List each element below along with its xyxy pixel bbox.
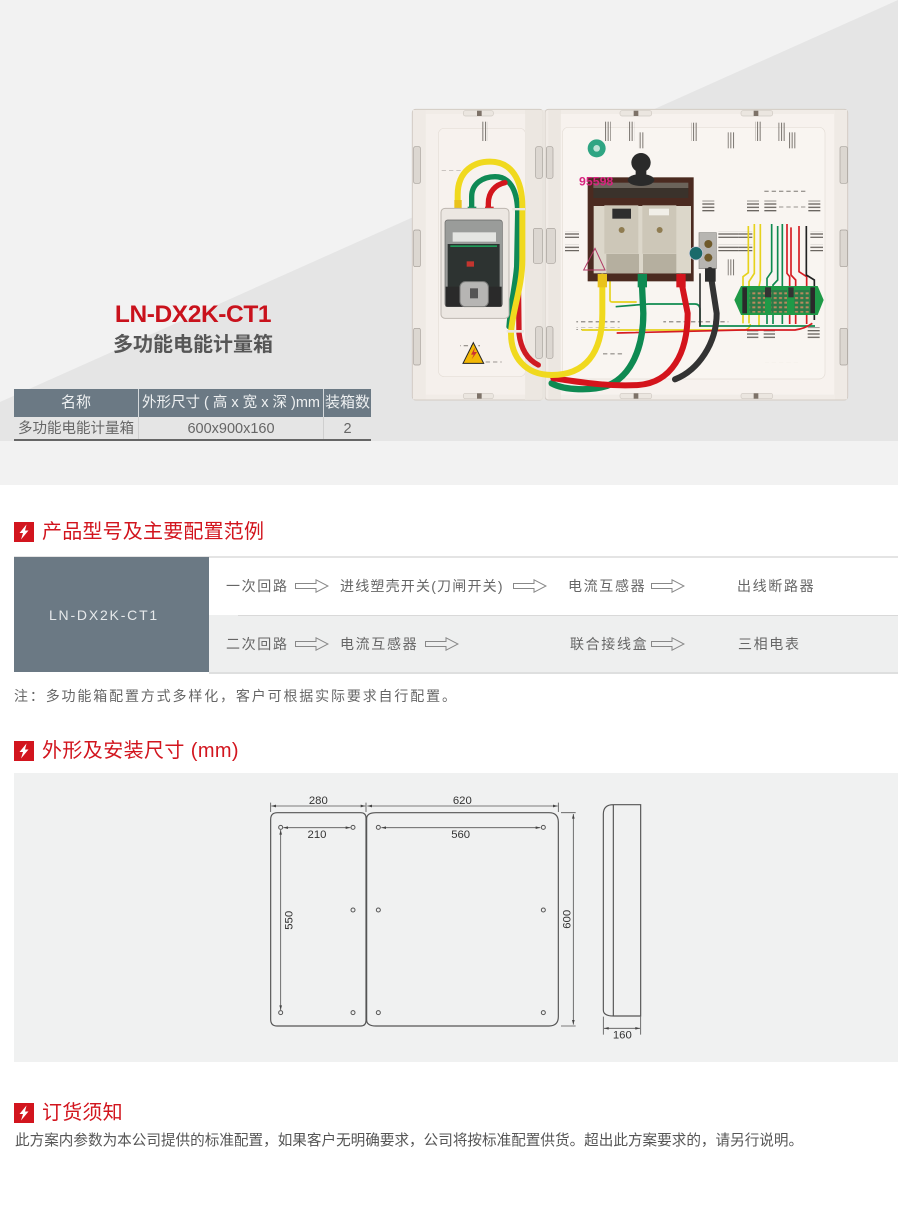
step: outgoing breaker: 出线断路器 [737,578,815,594]
arrowheads [271,805,640,1030]
dimension drawing [270,795,642,1042]
icon: lightning [14,741,34,761]
step: current transformer: 电流互感器 [340,636,418,652]
hinges and latches [414,111,847,399]
model cell [14,557,209,672]
knife switch base [584,177,694,281]
switch handle knob [628,153,654,186]
table data row [14,417,371,441]
dimension labels [284,795,632,1042]
icon: lightning [14,522,34,542]
side view [603,805,641,1016]
heading text: 外形及安装尺寸 (mm) [42,740,239,762]
table header row: 名称 [61,394,91,411]
arrow 3 [651,637,685,651]
step: secondary loop: 二次回路 [226,636,289,652]
spec table [14,389,371,441]
configuration note: 注：多功能箱配置方式多样化，客户可根据实际要求自行配置。 [14,688,458,704]
step: junction box: 联合接线盒 [570,636,648,652]
product photo: open meter box [412,108,848,400]
main thick wires [458,162,717,389]
table header row: 外形尺寸 ( 高 x 宽 x 深 )mm [142,395,320,411]
dimension labels: 560 [451,829,470,841]
mounting holes [279,825,545,1015]
section heading: model and configuration [14,521,264,543]
dimension labels: 210 [308,829,326,841]
green certification mark [588,139,606,157]
arrow 2 [425,637,459,651]
arrow 1 [295,579,329,593]
top row background [14,556,898,558]
table data row: 多功能电能计量箱 [18,421,134,437]
step: current transformer: 电流互感器 [568,578,646,594]
configuration table [14,556,898,674]
thin wires to terminal block [582,224,815,333]
green terminal block [734,286,824,315]
dimension drawing panel [14,773,898,1062]
dimension labels: 620 [453,795,472,807]
icon: lightning [14,1103,34,1123]
row divider [238,615,898,616]
95598 printed text: 95598 [579,174,613,188]
dimension labels: 160 [613,1030,632,1042]
bottom row background [209,615,898,674]
product title: LN-DX2K-CT1 [115,301,271,328]
step: primary loop: 一次回路 [226,578,289,594]
hero background [0,0,898,485]
table header row [14,389,371,417]
arrow 1 [295,637,329,651]
table data row: 600x900x160 [187,421,275,437]
model cell: LN-DX2K-CT1 [49,607,159,623]
table header row: 装箱数 [325,394,370,411]
vertical and horizontal slot perforations [440,122,823,364]
busbar clamp [689,233,716,269]
primary circuit row [226,578,815,594]
table data row: 2 [343,421,352,437]
warning triangle sticker [463,343,484,363]
step: three-phase meter: 三相电表 [738,636,801,652]
dimension labels: 600 [562,910,574,929]
arrow 3 [651,579,685,593]
heading text: 产品型号及主要配置范例 [42,521,264,543]
electric meter in clear cover [441,208,509,318]
section heading: ordering notes [14,1102,123,1124]
arrow 2 [513,579,547,593]
secondary circuit row [226,636,801,652]
wire terminals [454,200,716,287]
ordering notes text: 此方案内参数为本公司提供的标准配置，如果客户无明确要求，公司将按标准配置供货。超出此方案要求的，请另行说明。 [15,1133,803,1149]
cable ties [507,208,525,333]
dimension labels: 550 [284,911,296,930]
dimension lines [271,803,641,1035]
section heading: dimensions [14,740,239,762]
step: incoming switch: 进线塑壳开关(刀闸开关) [340,578,504,594]
box outlines [271,813,558,1026]
heading text: 订货须知 [42,1102,123,1124]
box shell panels [412,109,848,400]
dimension labels: 280 [309,795,328,807]
product subtitle: 多功能电能计量箱 [113,334,273,356]
